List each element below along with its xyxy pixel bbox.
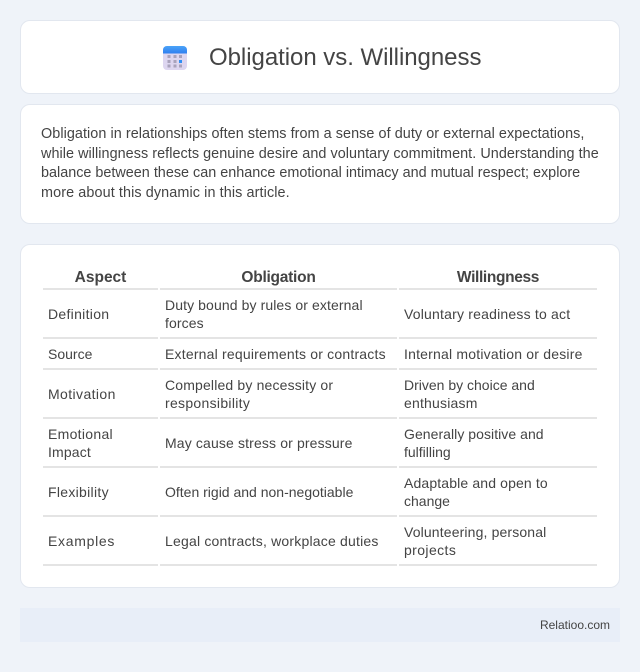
row: Examples: projects [404, 542, 456, 558]
row: Definition: Definition [48, 306, 109, 322]
row: Definition: forces [165, 315, 204, 331]
intro text: more about this dynamic in this article. [41, 184, 290, 200]
column heading: Aspect: Aspect [75, 269, 126, 286]
intro text: while willingness reflects genuine desire and voluntary commitment. Understanding the [41, 146, 599, 162]
row: Examples: Volunteering, personal [404, 524, 546, 540]
row: Motivation [48, 377, 535, 411]
row: Flexibility: change [404, 493, 450, 509]
row: Emotional Impact: Impact [48, 444, 91, 460]
row: Source: Source [48, 346, 92, 362]
row: Flexibility: Flexibility [48, 484, 109, 500]
row: Motivation: enthusiasm [404, 395, 478, 411]
row: Examples: Legal contracts, workplace duties [165, 533, 379, 549]
row: Flexibility: Often rigid and non-negotiable [165, 484, 353, 500]
row: Motivation: Compelled by necessity or [165, 377, 333, 393]
title: Obligation vs. Willingness [209, 44, 481, 71]
row: Motivation: Motivation [48, 386, 116, 402]
row: Motivation: responsibility [165, 395, 250, 411]
row: Definition: Duty bound by rules or external [165, 297, 363, 313]
row: Flexibility [48, 475, 548, 509]
intro text: balance between these can enhance emotional intimacy and mutual respect; explore [41, 165, 580, 181]
header panel [20, 20, 620, 94]
row: Emotional Impact: Generally positive and [404, 426, 544, 442]
row: Motivation: Driven by choice and [404, 377, 535, 393]
table panel [20, 244, 620, 588]
row: Source: Internal motivation or desire [404, 346, 583, 362]
row: Emotional Impact [48, 426, 544, 460]
row: Emotional Impact: May cause stress or pressure [165, 435, 353, 451]
row: Examples: Examples [48, 533, 115, 549]
intro text: Obligation in relationships often stems from a sense of duty or external expectations, [41, 126, 584, 142]
icon: calendar [163, 46, 187, 70]
intro panel [20, 104, 620, 224]
footer text: Relatioo.com [540, 618, 610, 632]
row: Definition: Voluntary readiness to act [404, 306, 570, 322]
intro text [41, 126, 599, 200]
column heading: Obligation: Obligation [241, 269, 316, 286]
column heading: Willingness: Willingness [457, 269, 539, 286]
row: Emotional Impact: Emotional [48, 426, 113, 442]
row: Source: External requirements or contracts [165, 346, 386, 362]
row: Definition [48, 297, 570, 331]
row: Flexibility: Adaptable and open to [404, 475, 548, 491]
row: Emotional Impact: fulfilling [404, 444, 451, 460]
row: Source [48, 346, 583, 362]
footer bar [20, 608, 620, 642]
row: Examples [48, 524, 546, 558]
